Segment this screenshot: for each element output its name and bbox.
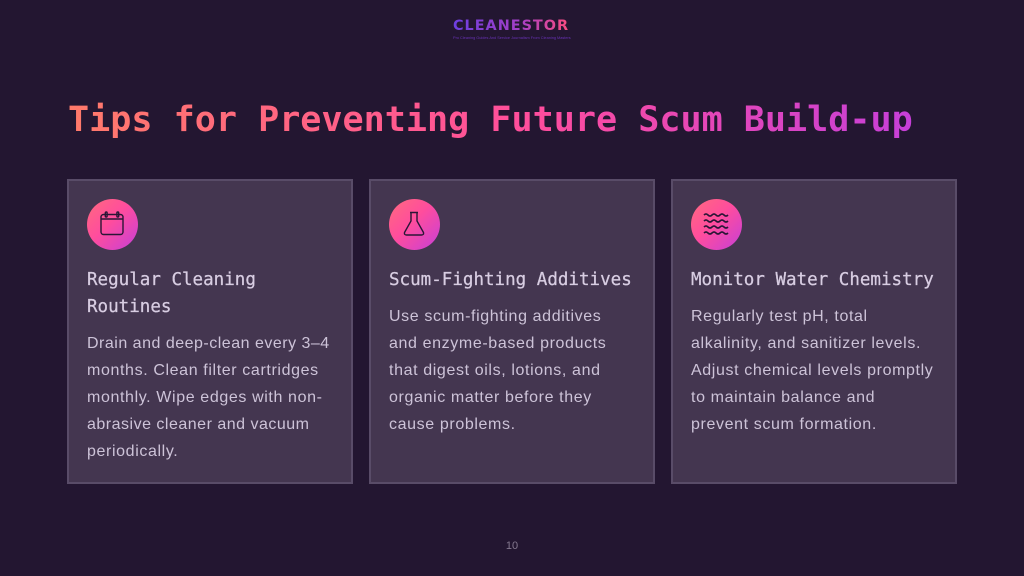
body text: Adjust chemical levels promptly [691, 362, 933, 378]
panel: monitor water chemistry [671, 179, 957, 484]
body text: that digest oils, lotions, and [389, 362, 601, 378]
body text: alkalinity, and sanitizer levels. [691, 334, 921, 352]
title: Tips for Preventing Future Scum Build-up [68, 99, 913, 140]
heading: Monitor Water Chemistry [691, 270, 934, 290]
body text: prevent scum formation. [691, 416, 877, 432]
body text: Regularly test pH, total [691, 308, 868, 324]
icon: waves [690, 198, 742, 250]
body text: periodically. [87, 442, 178, 460]
body text [389, 308, 606, 432]
heading [87, 270, 256, 316]
heading: Routines [87, 296, 171, 316]
logo wordmark: CLEANESTOR [453, 18, 569, 34]
body text: abrasive cleaner and vacuum [87, 416, 310, 432]
body text: Use scum-fighting additives [389, 308, 601, 324]
body text: organic matter before they [389, 388, 592, 406]
icon: flask [388, 198, 440, 250]
body text: and enzyme-based products [389, 334, 606, 352]
body text [691, 308, 933, 432]
body text: months. Clean filter cartridges [87, 362, 319, 378]
logo [453, 18, 571, 40]
page number: 10 [506, 540, 518, 552]
body text: Drain and deep-clean every 3–4 [87, 334, 330, 352]
logo tagline: Pro Cleaning Guides And Service Journalism From Cleaning Masters [453, 36, 571, 40]
body text: monthly. Wipe edges with non- [87, 388, 323, 406]
body text: cause problems. [389, 416, 516, 432]
heading: Regular Cleaning [87, 270, 256, 290]
body text: to maintain balance and [691, 388, 875, 406]
heading: Scum-Fighting Additives [389, 270, 632, 290]
icon: calendar [86, 198, 138, 250]
panel: scum-fighting additives [369, 179, 655, 484]
body text [87, 334, 330, 460]
panel: regular cleaning routines [67, 179, 353, 484]
